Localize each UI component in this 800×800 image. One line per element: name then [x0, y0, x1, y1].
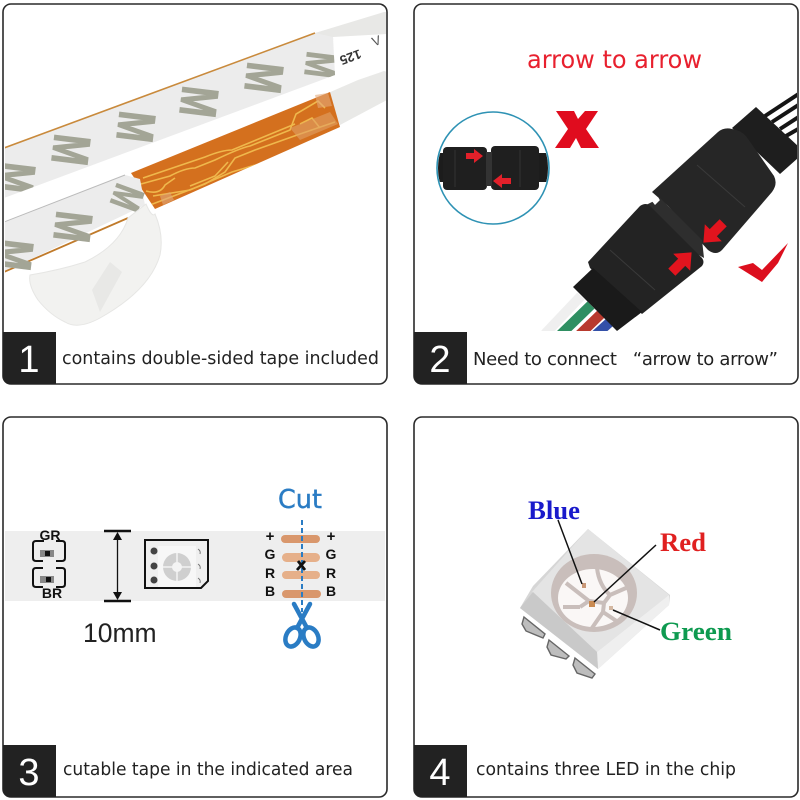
lower tape strip peeled liner — [0, 175, 153, 273]
pad labels: G — [265, 546, 276, 562]
label: Red: Red — [660, 527, 706, 557]
LED chip illustration — [520, 529, 670, 678]
pad labels: R — [265, 565, 275, 581]
panel 4: LED chip — [414, 417, 798, 797]
pad labels: G — [326, 546, 337, 562]
number badge 4 — [414, 745, 467, 797]
peeled curl of backing film — [30, 204, 161, 325]
pad labels: + — [266, 528, 275, 545]
lower tape strip peeled liner: M — [101, 178, 153, 217]
upper tape strip — [0, 12, 387, 198]
upper tape strip: M — [40, 131, 100, 168]
label line: Red — [594, 545, 656, 602]
upper tape strip: 125 — [338, 46, 363, 68]
connector photo illustration — [545, 93, 800, 340]
tape photo illustration — [0, 12, 387, 325]
solder pads — [281, 535, 321, 598]
caption 1: contains double-sided tape included — [62, 348, 379, 369]
number badge 2: 2 — [429, 339, 451, 381]
panel 2: connector direction — [414, 4, 800, 384]
resistor markings: BR — [42, 585, 62, 601]
label: 10mm: 10mm — [83, 618, 157, 648]
LED chip outline — [145, 540, 208, 588]
black cables — [765, 93, 800, 136]
pad labels — [265, 528, 337, 599]
number badge 3 — [3, 745, 56, 797]
pad labels: B — [326, 583, 336, 599]
resistor markings: GR — [40, 527, 60, 543]
label line: Blue — [558, 520, 582, 584]
icon: scissors — [282, 604, 322, 649]
pad labels: B — [265, 583, 275, 599]
number badge 3: 3 — [18, 752, 40, 794]
heading: arrow to arrow: arrow to arrow — [527, 45, 702, 74]
cut dashed line — [297, 520, 305, 612]
red arrows — [668, 252, 692, 276]
pad labels: + — [327, 528, 336, 545]
upper tape strip: M — [233, 59, 293, 96]
label: Green: Green — [660, 616, 732, 646]
panel 3: cut line — [3, 417, 387, 797]
label: Blue: Blue — [528, 495, 580, 525]
chip lens — [551, 554, 637, 632]
upper tape strip: V — [370, 32, 383, 49]
pad labels: R — [326, 565, 336, 581]
LED strip — [5, 527, 385, 601]
number badge 2 — [414, 332, 467, 384]
label line: Green — [613, 610, 660, 630]
connector bodies — [573, 107, 798, 331]
icon: wrong connection circle — [437, 112, 549, 224]
icon: red check mark — [738, 243, 788, 282]
resistor markings — [33, 527, 65, 601]
number badge 4: 4 — [429, 752, 451, 794]
icon: red cross — [555, 111, 599, 148]
upper tape strip: M — [168, 83, 228, 120]
caption 2: Need to connect “arrow to arrow” — [473, 349, 778, 370]
lower tape strip peeled liner: M — [42, 208, 102, 245]
upper tape strip: M — [294, 49, 346, 80]
caption 3: cutable tape in the indicated area — [63, 759, 353, 780]
label: Cut: Cut — [278, 485, 322, 515]
caption 4: contains three LED in the chip — [476, 759, 736, 780]
width dimension — [104, 531, 131, 601]
exposed orange circuit — [131, 92, 340, 209]
number badge 1: 1 — [18, 339, 40, 381]
chip pins — [522, 617, 595, 678]
lower tape strip white end — [328, 71, 387, 125]
upper tape strip: M — [105, 108, 165, 145]
panel 1: double-sided tape — [0, 4, 387, 384]
number badge 1 — [3, 332, 56, 384]
chip body — [520, 529, 670, 669]
wires — [545, 296, 610, 340]
